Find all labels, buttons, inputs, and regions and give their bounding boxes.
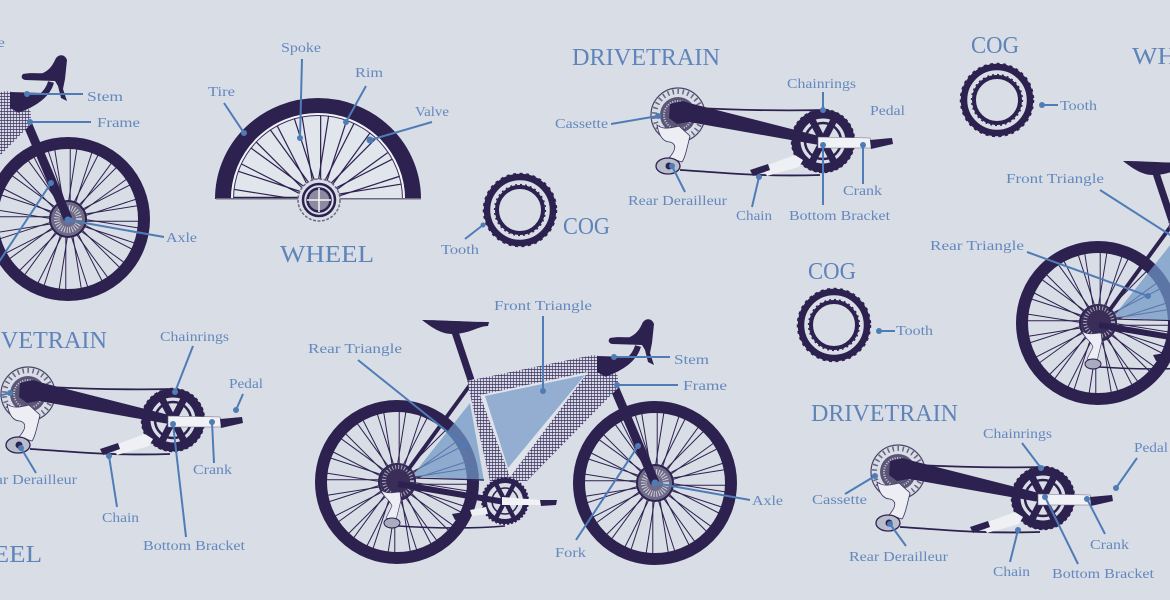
cog: lower middle: [798, 289, 870, 361]
drivetrain: lower right: [871, 445, 1113, 533]
label: Rear Triangle center: [308, 342, 467, 448]
label: Rear Triangle right: [930, 239, 1151, 299]
bike: left, cropped: [0, 55, 207, 352]
label: Tire: Tire: [208, 85, 235, 100]
label: Stem center: [611, 353, 709, 368]
wheel diagram: [215, 98, 421, 222]
label: Bottom Bracket left: Bottom Bracket: [143, 539, 245, 554]
label: Crank: Crank: [843, 184, 882, 199]
label: Cassette lower right: Cassette: [812, 493, 867, 508]
label: Chain lower right: Chain: [993, 565, 1030, 580]
label: Rear Derailleur: Rear Derailleur: [628, 194, 727, 209]
label: Pedal lower right: [1113, 441, 1168, 491]
label: Front Triangle right: [1006, 172, 1170, 238]
heading: DRIVETRAIN top: DRIVETRAIN: [572, 45, 720, 71]
label: Chainrings left: Chainrings: [160, 330, 229, 345]
label: Crank: [843, 142, 882, 199]
label: Chainrings left: [160, 330, 229, 395]
label: Tire: [208, 85, 247, 136]
heading: DRIVETRAIN lower right: DRIVETRAIN: [811, 401, 958, 427]
label: Bottom Bracket: Bottom Bracket: [789, 209, 890, 224]
label: Crank lower right: [1084, 496, 1129, 553]
label: Bottom Bracket lower right: Bottom Bracket: [1052, 567, 1154, 582]
label: Stem center: Stem: [674, 353, 709, 368]
label: Stem left: [24, 90, 123, 105]
drivetrain: top: [651, 88, 893, 176]
label: Bottom Bracket lower right: [1042, 494, 1154, 582]
label: Front Triangle right: Front Triangle: [1006, 172, 1104, 187]
bike: center: [262, 319, 794, 600]
label: Rear Triangle right: Rear Triangle: [930, 239, 1024, 254]
label: Cassette: Cassette: [555, 117, 608, 132]
label: Chainrings: Chainrings: [787, 77, 856, 92]
label: Pedal lower right: Pedal: [1134, 441, 1168, 456]
label: Front Triangle center: [494, 299, 592, 394]
label: Bottom Bracket left: [143, 421, 245, 554]
label: Tooth: [441, 222, 486, 258]
label: Tooth lower: [876, 324, 933, 339]
label: Bottom Bracket: [789, 142, 890, 224]
heading: WHEEL: WHEEL: [280, 242, 374, 268]
label: Axle left: Axle: [166, 231, 197, 246]
label: Valve: Valve: [415, 105, 449, 120]
label: Chain: [736, 174, 772, 224]
heading: COG lower: COG: [808, 259, 856, 285]
label: Spoke: [281, 41, 321, 141]
cog: top middle: [484, 174, 556, 246]
label: Rear Derailleur left: [0, 445, 77, 488]
label: Stem left: Stem: [87, 90, 123, 105]
half wheel spokes: [215, 98, 421, 199]
label: Chain lower right: [993, 527, 1030, 580]
label: Crank left: [193, 419, 232, 478]
label: Rear Derailleur lower right: [849, 521, 948, 565]
label: Crank lower right: Crank: [1090, 538, 1129, 553]
hub: [298, 179, 340, 221]
label: Frame left: Frame: [97, 116, 140, 131]
label: Cassette left stub: [0, 390, 13, 398]
label: Rim: [343, 66, 383, 125]
label: Cassette lower right: [812, 473, 878, 508]
label: Front Triangle center: Front Triangle: [494, 299, 592, 314]
label: Valve: [366, 105, 449, 144]
label: Fork center: Fork: [555, 546, 586, 561]
label: Spoke: Spoke: [281, 41, 321, 56]
bike: right, cropped: [963, 160, 1170, 457]
label: Chain left: Chain: [102, 511, 139, 526]
label: Rear Derailleur lower right: Rear Derailleur: [849, 550, 948, 565]
label: Cassette: [555, 113, 661, 132]
label: Rim: Rim: [355, 66, 383, 81]
label: Fork center: [555, 443, 641, 561]
label: Rear Triangle center: Rear Triangle: [308, 342, 402, 357]
label: Crank left: Crank: [193, 463, 232, 478]
cog: top right: [961, 64, 1033, 136]
label: Pedal left: [229, 377, 263, 413]
label: Chainrings: [787, 77, 856, 113]
label: Chainrings lower right: Chainrings: [983, 427, 1052, 442]
label: Axle left: [64, 216, 197, 246]
label: Frame left: [27, 116, 140, 131]
label: Pedal left: Pedal: [229, 377, 263, 392]
label: Chain: Chain: [736, 209, 772, 224]
label: Fork line left: [0, 180, 54, 277]
label: Chain left: [102, 453, 139, 526]
label: Tooth right: [1039, 99, 1097, 114]
label: Axle center: Axle: [752, 494, 783, 509]
label: Rear Derailleur: [628, 163, 727, 209]
label: Tooth lower: Tooth: [896, 324, 933, 339]
drivetrain: left, cropped: [1, 367, 243, 455]
label: Chainrings lower right: [983, 427, 1052, 471]
label: Tooth right: Tooth: [1060, 99, 1097, 114]
label: Axle center: [652, 480, 783, 509]
label: Frame center: [614, 379, 727, 394]
label: Tooth: Tooth: [441, 243, 479, 258]
heading: COG right: COG: [971, 33, 1019, 59]
heading: COG: COG: [563, 214, 610, 240]
label: Frame center: Frame: [683, 379, 727, 394]
label: Pedal: Pedal: [870, 104, 905, 119]
